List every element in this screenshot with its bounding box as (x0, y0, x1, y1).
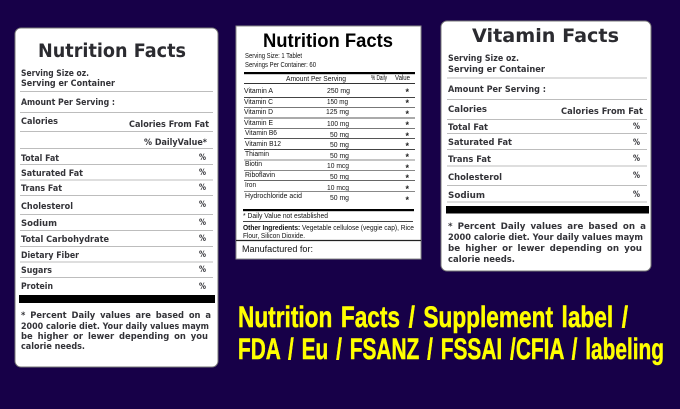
footnote: * Percent Daily values are based on a (21, 311, 211, 321)
vitamin rows: * (406, 195, 410, 205)
table header: Value (395, 75, 410, 82)
nutrient rows: % (199, 282, 206, 292)
panel: nutrition facts card (15, 28, 218, 367)
serving info (245, 53, 316, 69)
footnote: calorie needs. (448, 255, 515, 265)
nutrient rows: Total Carbohydrate (21, 235, 109, 245)
nutrient rows: Calories From Fat (561, 107, 643, 117)
serving info (448, 54, 546, 75)
panel: vitamin facts card (441, 21, 651, 271)
footnote: * Percent Daily values are based on a (448, 222, 646, 232)
nutrient rows (20, 92, 213, 292)
vitamin rows: * (406, 173, 410, 183)
footnote: calorie needs. (21, 342, 85, 352)
vitamin rows: Iron (245, 182, 256, 189)
vitamin rows: Vitamin D (244, 109, 273, 116)
nutrient rows: Amount Per Serving : (21, 98, 115, 108)
nutrient rows (447, 78, 647, 202)
nutrient rows: Trans Fat (21, 184, 62, 194)
nutrient rows: Trans Fat (448, 155, 491, 165)
vitamin rows: * (406, 141, 410, 151)
vitamin rows: Hydrochloride acid (245, 193, 302, 200)
vitamin rows: Vitamin E (244, 120, 273, 127)
vitamin rows: * (406, 87, 410, 97)
footnote (448, 222, 646, 265)
heading: vitamin facts: Vitamin Facts (472, 25, 619, 47)
nutrient rows: % (199, 153, 206, 163)
heading: nutrition facts: Nutrition Facts (38, 41, 186, 62)
vitamin rows: 125 mg (326, 109, 349, 116)
vitamin rows: Thiamin (245, 151, 269, 158)
vitamin rows (244, 87, 415, 205)
nutrient rows: Calories From Fat (129, 120, 209, 130)
vitamin rows: 50 mg (330, 174, 349, 181)
vitamin rows: 250 mg (327, 88, 350, 95)
thick rule (244, 72, 415, 74)
nutrient rows: % (633, 138, 640, 148)
nutrient rows: % (199, 200, 206, 210)
serving info (21, 69, 116, 89)
nutrient rows: Sugars (21, 266, 52, 276)
vitamin rows: * (406, 163, 410, 173)
nutrient rows: % (633, 122, 640, 132)
nutrient rows: % (199, 250, 206, 260)
vitamin rows: * (406, 152, 410, 162)
nutrient rows: Total Fat (448, 123, 488, 133)
vitamin rows: 50 mg (330, 195, 349, 202)
nutrient rows: Saturated Fat (448, 138, 512, 148)
serving info: Serving Size oz. (21, 69, 89, 79)
nutrient rows: % DailyValue* (144, 138, 208, 148)
nutrient rows: Sodium (21, 219, 57, 229)
vitamin rows: * (406, 131, 410, 141)
nutrient rows: Cholesterol (448, 173, 502, 183)
other ingredients (243, 225, 414, 240)
nutrient rows: % (199, 234, 206, 244)
panel: supplement label (236, 26, 421, 259)
other ingredients: Flour, Silicon Dioxide. (243, 233, 305, 240)
other ingredients: Other Ingredients: Vegetable cellulose (veggie cap), Rice (243, 225, 414, 232)
serving info: Servings Per Container: 60 (245, 62, 316, 69)
manufactured for: Manufactured for: (242, 244, 313, 254)
nutrient rows: Sodium (448, 191, 485, 201)
nutrient rows: % (633, 171, 640, 181)
daily value note: * Daily Value not established (243, 213, 328, 220)
black bar (19, 295, 215, 303)
vitamin rows: * (406, 98, 410, 108)
footnote: be higher or lewer depending on you (21, 332, 208, 342)
nutrient rows: Total Fat (21, 154, 59, 164)
heading: nutrition facts: Nutrition Facts (263, 31, 393, 52)
footnote: 2000 calorie diet. Your daily values maym (448, 233, 643, 243)
vitamin rows: 100 mg (327, 121, 349, 128)
serving info: Serving Size: 1 Tablet (245, 53, 302, 60)
headline: yellow service title (238, 301, 664, 366)
table header: Amount Per Serving (286, 76, 346, 83)
footnote: be higher or lewer depending on you (448, 244, 642, 254)
nutrient rows: % (199, 168, 206, 178)
nutrient rows: % (633, 154, 640, 164)
vitamin rows: Vitamin B12 (245, 141, 281, 148)
vitamin rows: Vitamin C (244, 99, 273, 106)
serving info: Serving Size oz. (448, 54, 519, 64)
vitamin rows: * (406, 109, 410, 119)
vitamin rows: * (406, 184, 410, 194)
vitamin rows: 50 mg (330, 153, 349, 160)
nutrient rows: % (199, 265, 206, 275)
table header: % Daily (371, 75, 387, 82)
vitamin rows: * (406, 120, 410, 130)
vitamin rows: 10 mcg (327, 163, 349, 170)
nutrient rows: Calories (448, 105, 487, 115)
nutrient rows: Saturated Fat (21, 169, 83, 179)
serving info: Serving er Container (21, 79, 116, 89)
nutrient rows: Protein (21, 282, 53, 292)
nutrient rows: Cholesterol (21, 202, 73, 212)
nutrient rows: Amount Per Serving : (448, 85, 546, 95)
vitamin rows: 10 mcg (327, 185, 349, 192)
nutrient rows: Calories (21, 117, 58, 127)
nutrient rows: % (199, 183, 206, 193)
footnote (21, 311, 211, 352)
nutrient rows: % (199, 218, 206, 228)
serving info: Serving er Container (448, 65, 546, 75)
vitamin rows: Vitamin A (244, 88, 273, 95)
vitamin rows: Vitamin B6 (245, 130, 277, 137)
vitamin rows: 50 mg (330, 142, 349, 149)
vitamin rows: 50 mg (330, 132, 349, 139)
thick rule (243, 209, 414, 211)
nutrient rows: % (633, 190, 640, 200)
vitamin rows: Biotin (245, 161, 262, 168)
vitamin rows: 150 mg (327, 99, 348, 106)
black bar (446, 206, 649, 214)
vitamin rows: Riboflavin (245, 172, 275, 179)
footnote: 2000 calorie diet. Your daily values maym (21, 322, 209, 332)
table header (244, 75, 415, 84)
nutrient rows: Dietary Fiber (21, 251, 80, 261)
